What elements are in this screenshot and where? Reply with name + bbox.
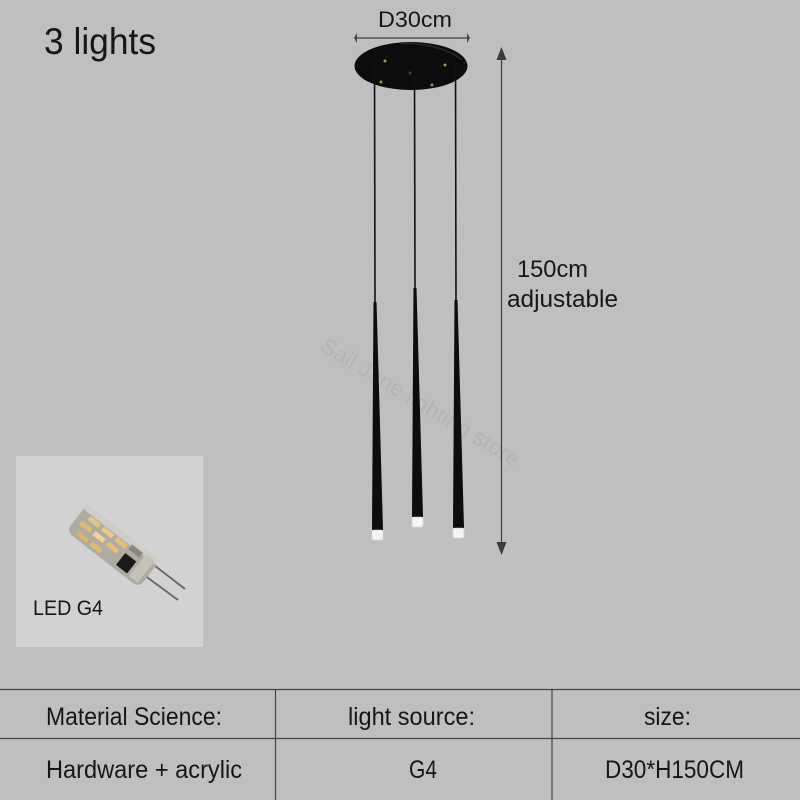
- specification table: [0, 689, 800, 800]
- bulb label: LED G4: [33, 597, 103, 620]
- diameter arrow: [354, 33, 470, 43]
- pendant middle: [412, 76, 423, 527]
- header: light source: light source:: [348, 703, 475, 731]
- height label: [507, 256, 618, 313]
- height label: adjustable: [507, 286, 618, 313]
- header: material: Material Science:: [46, 703, 222, 731]
- watermark: Sail Jane lighting store: [316, 333, 525, 472]
- pendant left: [372, 64, 383, 540]
- value: material: Hardware + acrylic: [46, 756, 242, 784]
- diameter label: D30cm: [378, 7, 452, 32]
- title: 3 lights: [44, 21, 156, 62]
- pendant right: [453, 64, 464, 538]
- height label: 150cm: [517, 256, 588, 283]
- table grid: [0, 689, 800, 800]
- ceiling canopy: [354, 42, 468, 90]
- diameter dimension: [354, 7, 470, 43]
- value: size: D30*H150CM: [605, 756, 744, 784]
- bulb panel: [16, 456, 203, 647]
- height dimension arrow: [496, 47, 506, 555]
- value: light source: G4: [409, 756, 437, 784]
- icon: G4 LED bulb: [66, 504, 185, 600]
- header: size: size:: [644, 703, 691, 731]
- pendant lamp: [354, 42, 468, 540]
